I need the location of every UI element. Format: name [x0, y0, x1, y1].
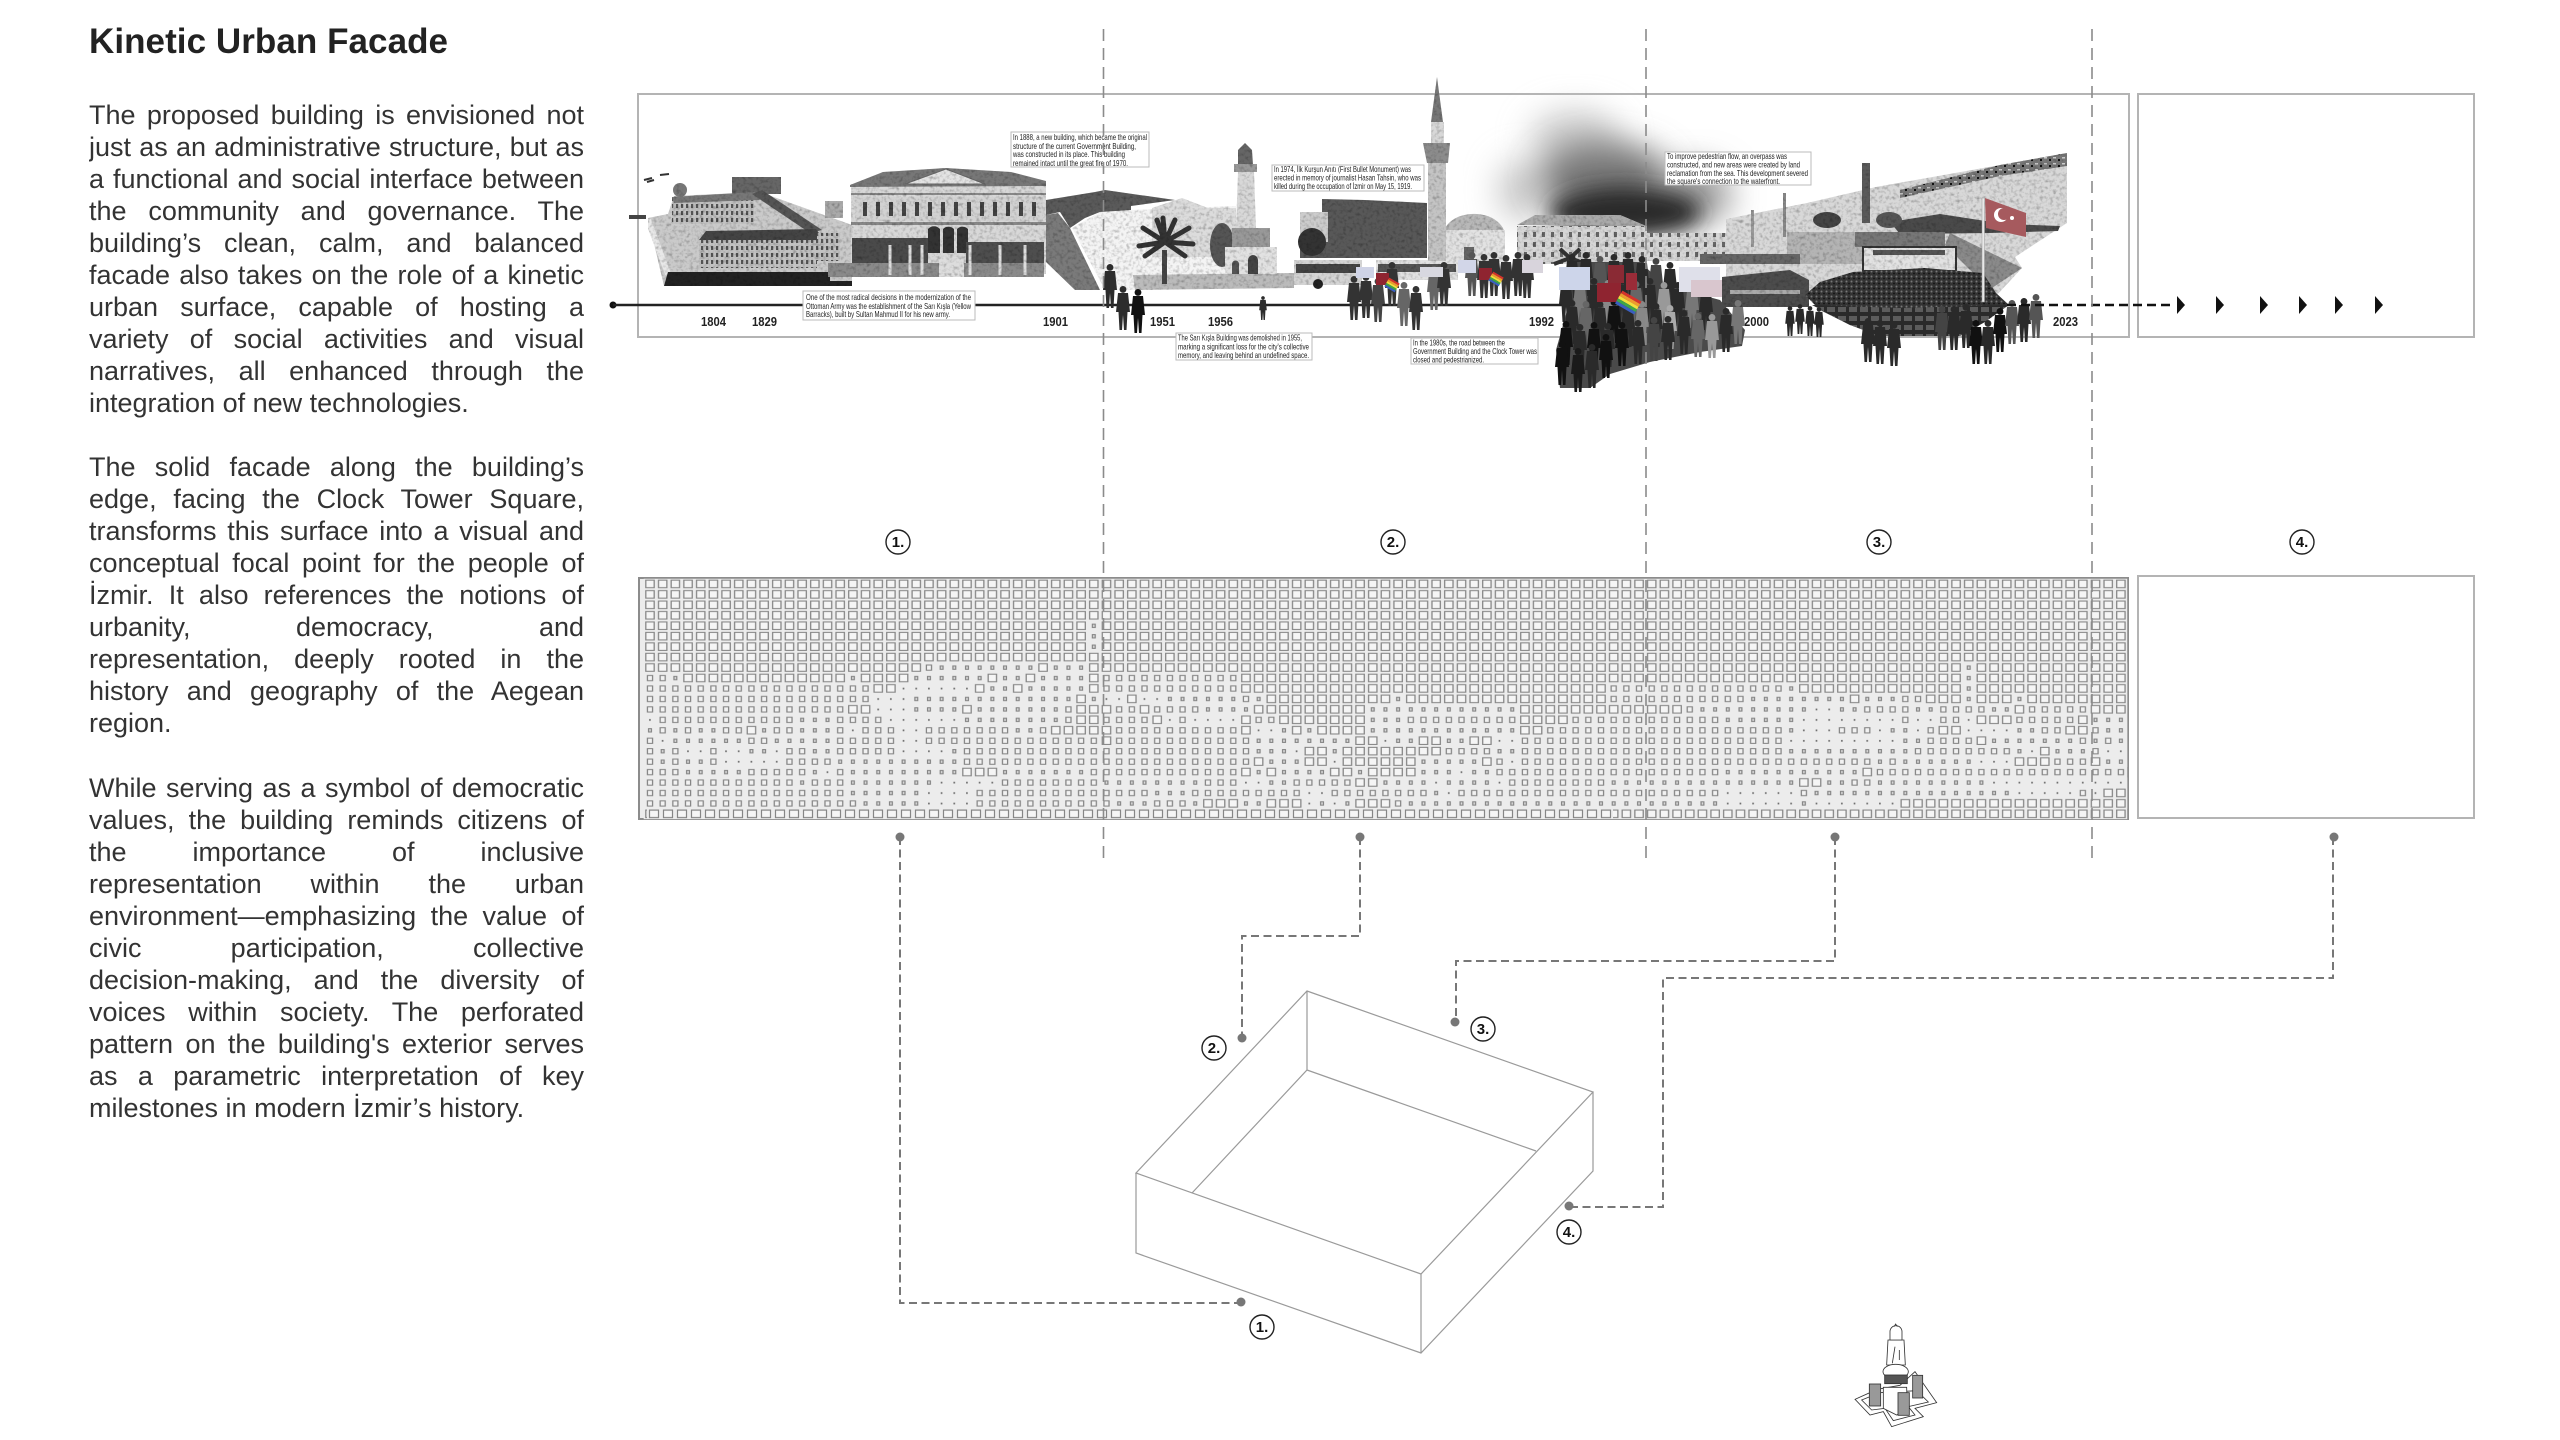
smoke cloud — [1497, 110, 1731, 238]
panel: blank facade frame — [2138, 576, 2474, 818]
paragraph: solid facade: edge, facing the Clock Tower Square, — [89, 484, 584, 514]
collage: Yellow Barracks — [648, 177, 852, 286]
leader dots — [896, 832, 2338, 1306]
caption: new Government Building: In 1888, a new building, which became the original — [1013, 132, 1147, 142]
title: Kinetic Urban Facade — [89, 22, 448, 61]
panel: perforated facade — [639, 578, 2128, 819]
caption: Sarı Kışla founding: One of the most radical decisions in the modernization of the — [806, 292, 971, 302]
caption: Sarı Kışla founding: Barracks), built by Sultan Mahmud II for his new army. — [806, 309, 950, 319]
paragraph: democratic values: as a parametric interpretation of key — [89, 1061, 584, 1091]
protest signs — [1356, 260, 1722, 302]
paragraph: democratic values: decision-making, and the diversity of — [89, 965, 584, 995]
caption: overpass: reclamation from the sea. This development severed — [1667, 168, 1808, 178]
collage: hill and road — [1046, 190, 1294, 290]
panel: timeline frame — [638, 94, 2129, 337]
collage: clock tower — [1225, 143, 1277, 274]
paragraph: proposed building: The proposed building is envisioned not — [89, 100, 584, 130]
box side numbers: 2. — [1208, 1040, 1220, 1057]
year labels: 2000 — [1744, 315, 1769, 329]
caption: pedestrianization: In the 1980s, the road between the — [1413, 338, 1505, 348]
year labels: 1804 — [701, 315, 726, 329]
paragraph: democratic values: pattern on the building's exterior serves — [89, 1029, 584, 1059]
paragraph: democratic values: voices within society. The perforated — [89, 997, 584, 1027]
crowd right of square — [1785, 294, 2043, 366]
paragraph: proposed building: urban surface, capable of hosting a — [89, 292, 584, 322]
paragraph: proposed building: narratives, all enhanced through the — [89, 356, 584, 386]
caption: demolition: marking a significant loss for the city's collective — [1178, 342, 1309, 352]
paragraph: solid facade: İzmir. It also references the notions of — [89, 580, 584, 610]
year labels: 1956 — [1208, 315, 1233, 329]
caption: overpass: To improve pedestrian flow, an overpass was — [1667, 151, 1787, 161]
section numbers: 2. — [1387, 534, 1399, 551]
collage: seated audience — [1805, 268, 2009, 336]
caption: new Government Building: structure of the current Government Building, — [1013, 141, 1136, 151]
caption: pedestrianization: Government Building and the Clock Tower was — [1413, 346, 1537, 356]
section numbers: 1. — [892, 534, 904, 551]
caption: demolition: The Sarı Kışla Building was demolished in 1955, — [1178, 332, 1302, 342]
timeline line with start dot — [610, 302, 1800, 308]
caption: demolition: memory, and leaving behind an undefined space. — [1178, 350, 1309, 360]
caption: demolition — [1176, 332, 1312, 360]
box side numbers: 1. — [1256, 1319, 1268, 1336]
caption: pedestrianization: closed and pedestrianized. — [1413, 354, 1484, 364]
caption: pedestrianization — [1411, 338, 1538, 364]
paragraph: democratic values: representation within the urban — [89, 869, 584, 899]
future timeline dashed line — [2007, 304, 2174, 306]
caption: new Government Building: remained intact until the great fire of 1970. — [1013, 158, 1128, 168]
paragraph: proposed building: integration of new technologies. — [89, 388, 469, 418]
paragraph: democratic values — [89, 773, 584, 1123]
year labels: 1829 — [752, 315, 777, 329]
icon: clock tower axonometric — [1855, 1324, 1937, 1427]
panel: timeline future frame — [2138, 94, 2474, 337]
caption: overpass: constructed, and new areas were created by land — [1667, 160, 1800, 170]
section numbers — [886, 530, 2314, 554]
box side numbers: 3. — [1477, 1021, 1489, 1038]
paragraph: solid facade: region. — [89, 708, 172, 738]
year labels: 1951 — [1150, 315, 1175, 329]
paragraph: solid facade: transforms this surface into a visual and — [89, 516, 584, 546]
year labels — [701, 315, 2078, 329]
caption: First Bullet Monument — [1272, 164, 1424, 191]
box side numbers: 4. — [1563, 1224, 1575, 1241]
collage: Turkish flag — [1982, 198, 2026, 302]
protest crowd left — [1347, 252, 1534, 330]
caption: Sarı Kışla founding — [803, 291, 975, 320]
caption: new Government Building: was constructed in its place. This building — [1012, 149, 1125, 159]
birds and left marker — [629, 174, 669, 219]
collage buildings — [648, 77, 2067, 307]
paragraph: proposed building: the community and governance. The — [89, 196, 584, 226]
caption: First Bullet Monument: killed during the occupation of İzmir on May 15, 1919. — [1274, 181, 1412, 191]
paragraph: solid facade: representation, deeply rooted in the — [89, 644, 584, 674]
caption: First Bullet Monument: In 1974, İlk Kurşun Anıtı (First Bullet Monument) was — [1274, 164, 1411, 174]
paragraph: solid facade: urbanity, democracy, and — [89, 612, 584, 642]
caption: First Bullet Monument: erected in memory of journalist Hasan Tahsin, who was — [1274, 172, 1421, 182]
paragraph: solid facade: The solid facade along the building’s — [89, 452, 584, 482]
collage: dark buildings and trolley bus — [1294, 199, 1458, 289]
paragraph: proposed building: a functional and social interface between — [89, 164, 584, 194]
paragraph: democratic values: civic participation, collective — [89, 933, 584, 963]
paragraph: democratic values: While serving as a symbol of democratic — [89, 773, 584, 803]
collage: Government Building — [828, 168, 1046, 277]
protest crowd main — [1555, 252, 1745, 392]
section numbers: 4. — [2296, 534, 2308, 551]
paragraph: solid facade: history and geography of the Aegean — [89, 676, 584, 706]
year labels: 1901 — [1043, 315, 1068, 329]
paragraph: democratic values: values, the building reminds citizens of — [89, 805, 584, 835]
paragraph: proposed building: variety of social activities and visual — [89, 324, 584, 354]
paragraph: democratic values: environment—emphasizing the value of — [89, 901, 584, 931]
caption: overpass — [1665, 151, 1811, 186]
people near 1951 — [1103, 264, 1267, 333]
paragraph: proposed building — [89, 100, 584, 418]
axonometric building box — [1136, 991, 1593, 1353]
collage: palm and clock tower building — [1139, 198, 1236, 284]
paragraph: democratic values: the importance of inclusive — [89, 837, 584, 867]
section dividers — [1104, 29, 2092, 862]
paragraph: solid facade — [89, 452, 584, 738]
paragraph: proposed building: just as an administrative structure, but as — [89, 132, 584, 162]
year labels: 2023 — [2053, 315, 2078, 329]
leader lines — [900, 837, 2333, 1303]
paragraph: democratic values: milestones in modern İzmir’s history. — [89, 1093, 524, 1123]
collage: modern square aerial view — [1700, 153, 2067, 307]
caption: Sarı Kışla founding: Ottoman Army was the establishment of the Sarı Kışla (Yellow — [806, 301, 972, 311]
rainbow flags — [1384, 272, 1642, 315]
future timeline arrowheads — [2177, 296, 2383, 314]
paragraph: proposed building: building’s clean, calm, and balanced — [89, 228, 584, 258]
paragraph: solid facade: conceptual focal point for the people of — [89, 548, 584, 578]
box side numbers — [1202, 1017, 1581, 1339]
section numbers: 3. — [1873, 534, 1885, 551]
collage: historic square building — [1517, 215, 1746, 278]
caption: new Government Building — [1011, 132, 1149, 168]
paragraph: proposed building: facade also takes on the role of a kinetic — [89, 260, 584, 290]
collage: mosque and minaret — [1423, 77, 1505, 262]
year labels: 1992 — [1529, 315, 1554, 329]
caption: overpass: the square's connection to the waterfront. — [1667, 176, 1780, 186]
